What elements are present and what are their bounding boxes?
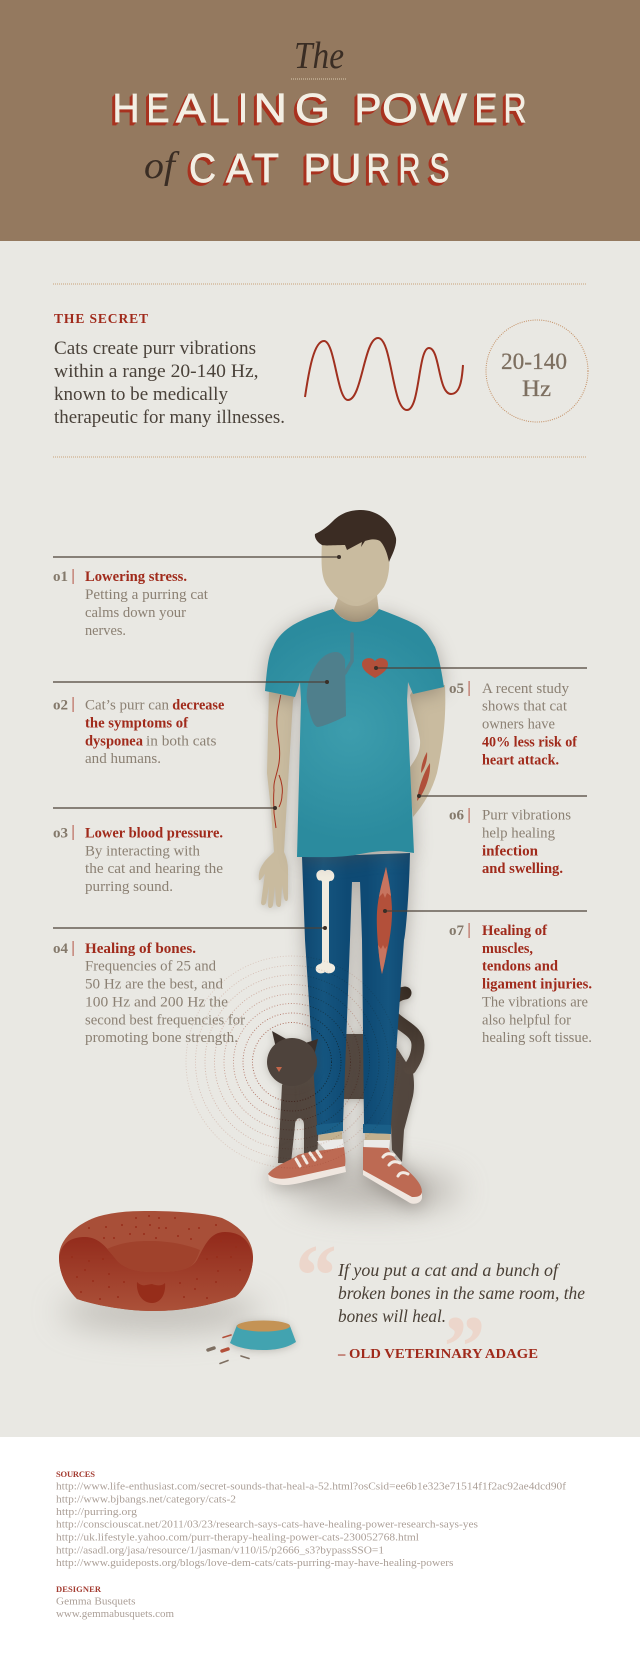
title: Cat Purrs: T [254,145,279,191]
title: The: The [294,35,344,77]
sound ripples [186,956,398,1168]
sources: SOURCES [56,1469,95,1479]
title: Healing Power: A [176,85,207,131]
title: Cat Purrs: A [226,145,254,191]
hair [315,510,396,562]
t-shirt [265,609,444,857]
legs [268,853,422,1204]
title: Healing Power: I [238,85,248,131]
person figure [259,510,445,1204]
quote [291,1228,585,1396]
frequency badge: 20-140 [501,349,567,374]
title: Healing Power: O [382,85,418,131]
closing quote mark: ” [439,1299,483,1396]
item 02: dyspnea: the symptoms of [85,716,188,732]
title: Healing Power: P [354,85,382,131]
item 03: blood pressure: Lower blood pressure. [85,826,223,842]
callout 5 [374,666,587,670]
designer: Gemma Busquets [56,1596,136,1608]
sources: http://www.life-enthusiast.com/secret-sounds-that-heal-a-52.html?osCsid=ee6b1e323e71514f1f2ac92ae4dcd90f [56,1480,566,1492]
title: Cat Purrs: U [330,145,362,191]
item 01: lowering stress: o1 [53,569,68,585]
item 04: bones [53,941,245,1046]
item 04: bones: 100 Hz and 200 Hz the [85,994,228,1010]
item 03: blood pressure: o3 [53,826,68,842]
title: of: of [144,145,180,187]
item 01: lowering stress [53,569,208,639]
item 02: dyspnea: o2 [53,698,68,714]
item 07: muscles: healing soft tissue. [482,1030,592,1046]
item 04: bones: second best frequencies for [85,1012,245,1028]
sources [56,1469,566,1569]
item 01: lowering stress: Lowering stress. [85,569,187,585]
secret description: within a range 20-140 Hz, [54,361,258,382]
item 03: blood pressure [53,825,223,895]
blood vessels [274,695,282,828]
item 01: lowering stress: calms down your [85,605,186,621]
quote text [337,1260,585,1326]
bed shadow [60,1292,260,1332]
cat head [267,1031,318,1086]
item 01: lowering stress: nerves. [85,623,126,639]
designer: www.gemmabusquets.com [56,1608,174,1620]
floor shadow [290,1170,460,1210]
callout 3 [53,806,277,810]
right shoe [363,1147,422,1204]
item 01: lowering stress: Petting a purring cat [85,587,208,603]
wave chart [305,338,463,410]
designer [56,1584,174,1620]
cat body [278,993,418,1163]
title: Cat Purrs: S [430,145,450,191]
item 06: infection: help healing [482,826,556,842]
item 02: dyspnea: in both cats [146,734,217,750]
title: Healing Power: E [146,85,170,131]
item 07: muscles: The vibrations are [482,994,588,1010]
item 07: muscles: also helpful for [482,1012,571,1028]
title: Cat Purrs: P [304,145,330,191]
item 06: infection: and swelling. [482,861,563,877]
item 05: heart: 40% less risk of [482,734,577,750]
callout 1 [53,555,341,559]
sources: http://purring.org [56,1506,138,1518]
frequency badge: Hz [522,376,551,401]
secret description: therapeutic for many illnesses. [54,407,285,428]
item 05: heart: shows that cat [482,699,567,715]
food bowl [230,1320,296,1350]
item 02: dyspnea: Cat’s purr can [85,698,170,714]
item 02: dyspnea: decrease [172,698,225,714]
item 05: heart [449,681,577,768]
sources: http://www.guideposts.org/blogs/love-dem-cats/cats-purring-may-have-healing-powers [56,1557,454,1569]
bed cat emblem [137,1282,165,1303]
title: Healing Power: E [474,85,498,131]
panel: the secret [54,311,588,428]
secret description: Cats create purr vibrations [54,338,256,359]
callout lines [53,555,587,930]
secret description [54,338,285,428]
header banner [0,0,640,241]
title: Healing Power: R [504,85,526,131]
icon: bone [316,870,335,973]
item 07: muscles: muscles, [482,941,533,957]
item 04: bones: promoting bone strength. [85,1030,238,1046]
footer [0,1437,640,1653]
item 07: muscles: o7 [449,923,464,939]
title: Healing Power: G [295,85,330,131]
item 03: blood pressure: By interacting with [85,844,201,860]
icon: lungs [307,634,352,727]
item 06: infection: Purr vibrations [482,808,571,824]
head [322,535,389,606]
sources: http://asadl.org/jasa/resource/1/jasman/v110/i5/p2666_s3?bypassSSO=1 [56,1544,384,1556]
callout 6 [417,794,587,798]
arm wounds [417,752,430,801]
item 04: bones: o4 [53,941,69,957]
title: Healing Power: H [112,85,140,131]
item 04: bones: Frequencies of 25 and [85,959,217,975]
cat bed [59,1211,253,1311]
left shoe [268,1147,346,1185]
ankles and socks [319,1131,342,1142]
item 02: dyspnea [53,697,225,767]
right arm [408,685,445,817]
title: Cat Purrs: C [189,145,216,191]
title separator [291,78,347,80]
title: Healing Power [112,85,526,131]
icon: muscle [377,867,392,974]
heading: the secret: THE SECRET [54,311,148,326]
title: Healing Power: W [420,85,467,131]
title: Healing Power: L [212,85,230,131]
bed seat [107,1241,200,1272]
quote text: If you put a cat and a bunch of [337,1260,561,1280]
item 06: infection [449,808,571,877]
quote text: broken bones in the same room, the [338,1283,585,1303]
callout 7 [383,909,587,913]
quote attribution: – OLD VETERINARY ADAGE [337,1346,538,1361]
item 07: muscles: tendons and [482,959,558,975]
callout 4 [53,926,327,930]
title: Cat Purrs [189,145,450,191]
title: Cat Purrs: R [366,145,390,191]
icon: heart [362,658,388,678]
item 06: infection: infection [482,843,538,859]
sources: http://consciouscat.net/2011/03/23/research-says-cats-have-healing-power-research-says-yes [56,1519,478,1531]
item 02: dyspnea: and humans. [85,751,161,767]
item 07: muscles: ligament injuries. [482,977,592,993]
treats [208,1335,249,1364]
cat nose [276,1067,282,1072]
item 07: muscles [449,923,592,1046]
item 04: bones: Healing of bones. [85,941,196,957]
title: Healing Power: N [254,85,287,131]
item 05: heart: owners have [482,717,555,733]
item 05: heart: heart attack. [482,752,559,768]
left arm [259,690,295,908]
item 05: heart: A recent study [482,681,570,697]
item 07: muscles: Healing of [482,923,547,939]
bed dots [71,1215,241,1300]
neck [333,595,379,626]
frequency badge [486,320,588,422]
item 06: infection: o6 [449,808,464,824]
item 04: bones: 50 Hz are the best, and [85,977,224,993]
callout 2 [53,680,329,684]
title: Cat Purrs: R [398,145,420,191]
designer: DESIGNER [56,1584,102,1594]
sources: http://www.bjbangs.net/category/cats-2 [56,1493,236,1505]
item 03: blood pressure: purring sound. [85,879,173,895]
jeans cuffs [316,1122,343,1135]
item 02: dyspnea: dysponea [85,734,144,750]
quote text: bones will heal. [338,1306,446,1326]
cat tail [390,993,418,1068]
secret description: known to be medically [54,384,228,405]
sources: http://uk.lifestyle.yahoo.com/purr-therapy-healing-power-cats-230052768.html [56,1532,419,1544]
opening quote mark: “ [291,1228,335,1325]
item 05: heart: o5 [449,681,464,697]
item 03: blood pressure: the cat and hearing the [85,861,223,877]
